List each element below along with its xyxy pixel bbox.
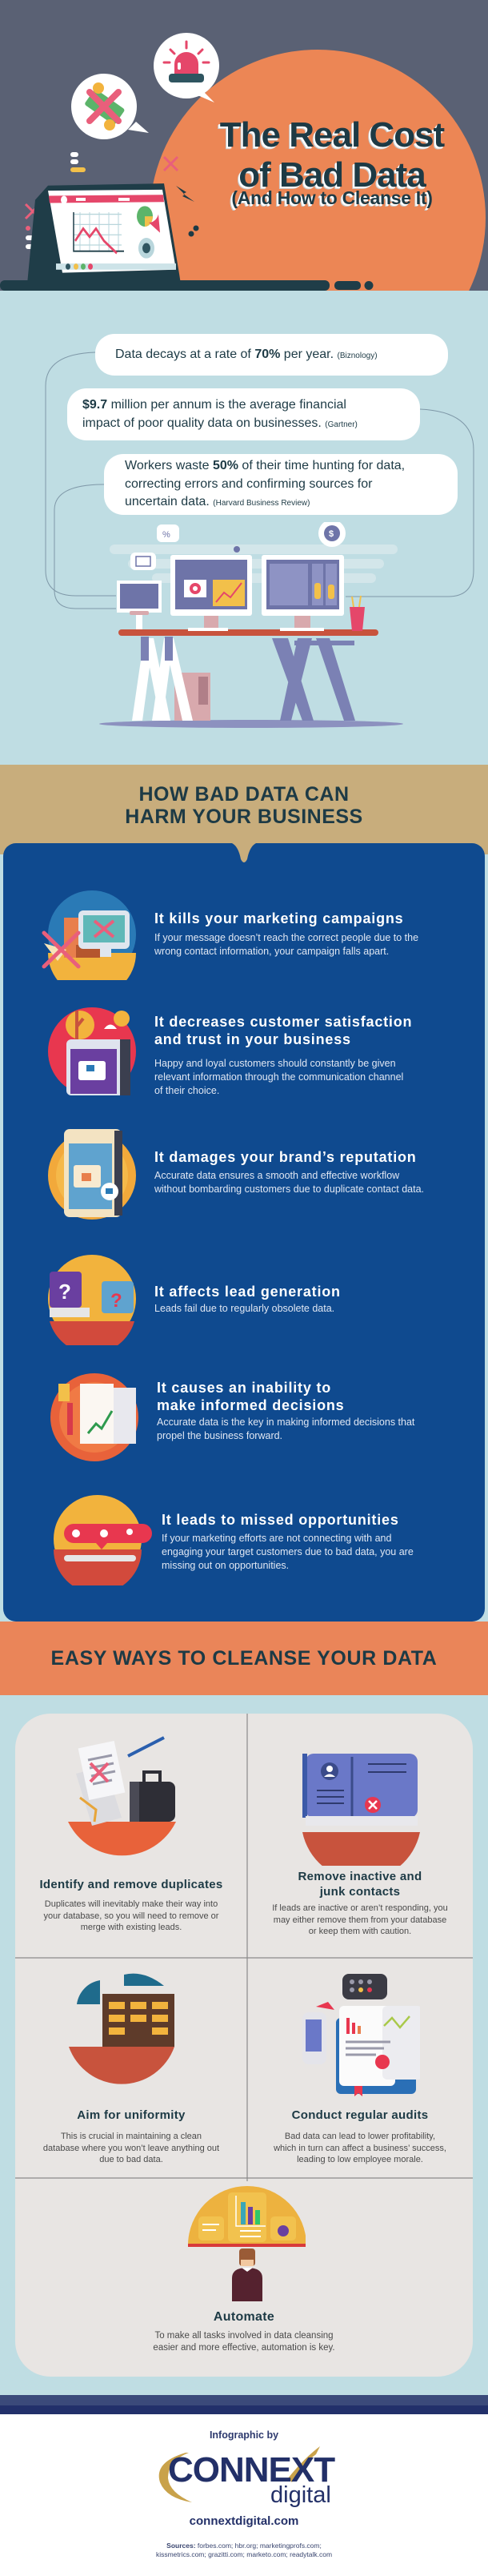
heading: how bad data can harm: HARM YOUR BUSINESS xyxy=(125,806,363,828)
icon: lead generation: ? xyxy=(58,1280,71,1304)
text: duplicates: Duplicates will inevitably make their way into xyxy=(45,1899,218,1909)
text: sources: kissmetrics.com; grazitti.com; marketo.com; readytalk.com xyxy=(156,2550,332,2558)
text: sources: Sources: forbes.com; hbr.org; marketingprofs.com; xyxy=(166,2542,322,2550)
panel: harms xyxy=(3,843,485,1622)
text: informed decisions: make informed decisions xyxy=(157,1397,344,1413)
text: lead generation: Leads fail due to regularly obsolete data. xyxy=(154,1303,334,1314)
text: uniformity: This is crucial in maintaining a clean xyxy=(61,2132,202,2141)
text: automate xyxy=(120,2330,368,2353)
icon: brand reputation xyxy=(48,1129,136,1220)
item 4 xyxy=(48,1255,341,1345)
desk illustration: $ xyxy=(329,529,334,539)
cell 4: audits xyxy=(247,1970,473,2170)
stat bubble 1 xyxy=(95,334,448,376)
text: customer trust xyxy=(154,1014,412,1096)
stat bubble 3 xyxy=(104,454,458,515)
text: informed decisions: Accurate data is the key in making informed decisions that xyxy=(157,1417,414,1428)
icon: alarm bubble xyxy=(154,33,219,102)
text: audits: leading to low employee morale. xyxy=(297,2155,423,2164)
item 5 xyxy=(50,1373,414,1461)
stat bubble 3: correcting errors and confirming sources for xyxy=(125,477,372,490)
icon: money bubble xyxy=(71,74,149,139)
title xyxy=(218,115,445,211)
text: inactive xyxy=(272,1903,448,1936)
text: duplicates: your database, so you will need to remove or xyxy=(44,1911,218,1920)
orange band heading: EASY WAYS TO CLEANSE YOUR DATA xyxy=(51,1647,437,1670)
text: url: connextdigital.com xyxy=(190,2514,298,2528)
icon: marketing campaign xyxy=(42,890,136,980)
footer xyxy=(0,2414,488,2576)
cell 5: automate xyxy=(120,2184,368,2357)
text: duplicates xyxy=(43,1899,219,1932)
text: kills campaigns: It kills your marketing campaigns xyxy=(154,910,403,926)
orange band heading xyxy=(0,1622,488,1695)
cell 2: inactive contacts xyxy=(272,1754,448,1936)
pointer tab xyxy=(232,843,256,862)
text: informed decisions: propel the business forward. xyxy=(157,1430,282,1441)
stat bubble 3: Workers waste 50% of their time hunting for data, xyxy=(125,459,405,472)
text: customer trust: relevant information through the communication channel xyxy=(154,1071,403,1083)
stat bubble 3: uncertain data. (Harvard Business Review) xyxy=(125,495,310,508)
text: inactive: may either remove them from your database xyxy=(274,1915,446,1925)
stat bubble 2: $9.7 million per annum is the average financial xyxy=(82,398,346,412)
title: of Bad Data xyxy=(238,155,426,195)
text: missed opportunities: engaging your target customers due to bad data, you are xyxy=(162,1546,414,1557)
item 2 xyxy=(48,1007,412,1096)
text: informed decisions xyxy=(157,1380,414,1441)
title: audits: Conduct regular audits xyxy=(292,2108,428,2122)
text: missed opportunities: missing out on opportunities. xyxy=(162,1560,289,1571)
hero background circle xyxy=(153,50,486,291)
icon: automate xyxy=(186,2184,306,2305)
text: inactive: or keep them with caution. xyxy=(309,1927,411,1936)
logo wordmark: CONNEXT xyxy=(168,2450,334,2490)
heading: how bad data can harm xyxy=(125,783,363,828)
text: missed opportunities xyxy=(162,1512,414,1571)
item 1 xyxy=(42,890,418,980)
text: kills campaigns: wrong contact information, your campaign falls apart. xyxy=(154,946,389,957)
text: audits: which in turn can affect a business’ success, xyxy=(274,2143,446,2152)
text: kills campaigns xyxy=(154,910,418,957)
icon: missed opportunities xyxy=(54,1495,152,1585)
icon: lead generation: ? xyxy=(110,1290,122,1312)
icon: duplicates xyxy=(68,1736,176,1856)
text: inactive: If leads are inactive or aren’t responding, you xyxy=(272,1903,448,1913)
icon: informed decisions xyxy=(50,1373,138,1461)
hero section xyxy=(0,0,488,291)
title: uniformity: Aim for uniformity xyxy=(77,2108,186,2122)
text: informed decisions: It causes an inability to xyxy=(157,1380,331,1396)
item 3 xyxy=(48,1129,424,1220)
title: The Real Cost xyxy=(220,115,444,155)
text: customer trust: It decreases customer satisfaction xyxy=(154,1014,412,1030)
connector lines xyxy=(45,352,474,609)
desk illustration xyxy=(99,522,403,728)
text: uniformity: due to bad data. xyxy=(99,2155,163,2164)
title: (And How to Cleanse It) xyxy=(231,187,433,208)
text: duplicates: merge with existing leads. xyxy=(81,1923,182,1932)
text: uniformity: database where you won’t leave anything out xyxy=(43,2143,219,2152)
text: missed opportunities: It leads to missed opportunities xyxy=(162,1512,399,1528)
icon: uniformity xyxy=(69,1973,174,2084)
footer bars xyxy=(0,2395,488,2414)
text: lead generation xyxy=(154,1284,341,1314)
cell 1: duplicates xyxy=(39,1736,223,1932)
title: identify duplicates: Identify and remove duplicates xyxy=(39,1878,223,1891)
text: customer trust: Happy and loyal customers should constantly be given xyxy=(154,1058,396,1069)
item 6 xyxy=(54,1495,414,1585)
title: remove inactive: junk contacts xyxy=(320,1885,400,1899)
text: kills campaigns: If your message doesn’t reach the correct people due to the xyxy=(154,932,418,943)
text: automate: To make all tasks involved in data cleansing xyxy=(154,2331,334,2341)
text: audits: Bad data can lead to lower profitability, xyxy=(285,2132,435,2141)
stat bubble 2 xyxy=(67,388,420,440)
text: customer trust: and trust in your business xyxy=(154,1031,351,1047)
text: lead generation: It affects lead generation xyxy=(154,1284,341,1300)
text: brand reputation: It damages your brand’s reputation xyxy=(154,1149,417,1165)
text: brand reputation: Accurate data ensures a smooth and effective workflow xyxy=(154,1170,399,1181)
stat bubble 2: impact of poor quality data on businesses. (Gartner) xyxy=(82,416,358,430)
text: customer trust: of their choice. xyxy=(154,1085,219,1096)
logo digital: digital xyxy=(270,2482,331,2508)
desk illustration: % xyxy=(162,530,170,540)
icon: lead generation xyxy=(48,1255,136,1345)
heading: how bad data can harm: HOW BAD DATA CAN xyxy=(138,783,350,806)
stat bubble 1: Data decays at a rate of 70% per year. (Biznology) xyxy=(115,348,378,361)
text: sources xyxy=(0,2542,488,2559)
text: infographic by: Infographic by xyxy=(210,2429,278,2441)
text: audits xyxy=(247,2131,473,2165)
text: uniformity xyxy=(43,2132,219,2164)
icon: contact card xyxy=(302,1754,420,1866)
text: missed opportunities: If your marketing efforts are not connecting with and xyxy=(162,1533,391,1544)
cell 3: uniformity xyxy=(43,1973,219,2164)
text: automate: easier and more effective, automation is key. xyxy=(153,2343,335,2353)
title: remove inactive xyxy=(298,1870,422,1899)
stats section xyxy=(45,334,474,728)
tan band xyxy=(0,765,488,854)
decorative marks xyxy=(25,152,198,249)
icon: customer satisfaction xyxy=(48,1007,136,1095)
logo swoosh xyxy=(152,2446,344,2522)
laptop illustration xyxy=(27,183,181,280)
text: brand reputation: without bombarding customers due to duplicate contact data. xyxy=(154,1184,424,1195)
title: automate: Automate xyxy=(214,2310,274,2324)
logo xyxy=(152,2446,344,2522)
panel: cleanse steps xyxy=(15,1714,473,2377)
title: remove inactive: Remove inactive and xyxy=(298,1870,422,1883)
icon: audits xyxy=(300,1970,420,2102)
text: brand reputation xyxy=(154,1149,424,1195)
desk bar xyxy=(0,280,373,291)
